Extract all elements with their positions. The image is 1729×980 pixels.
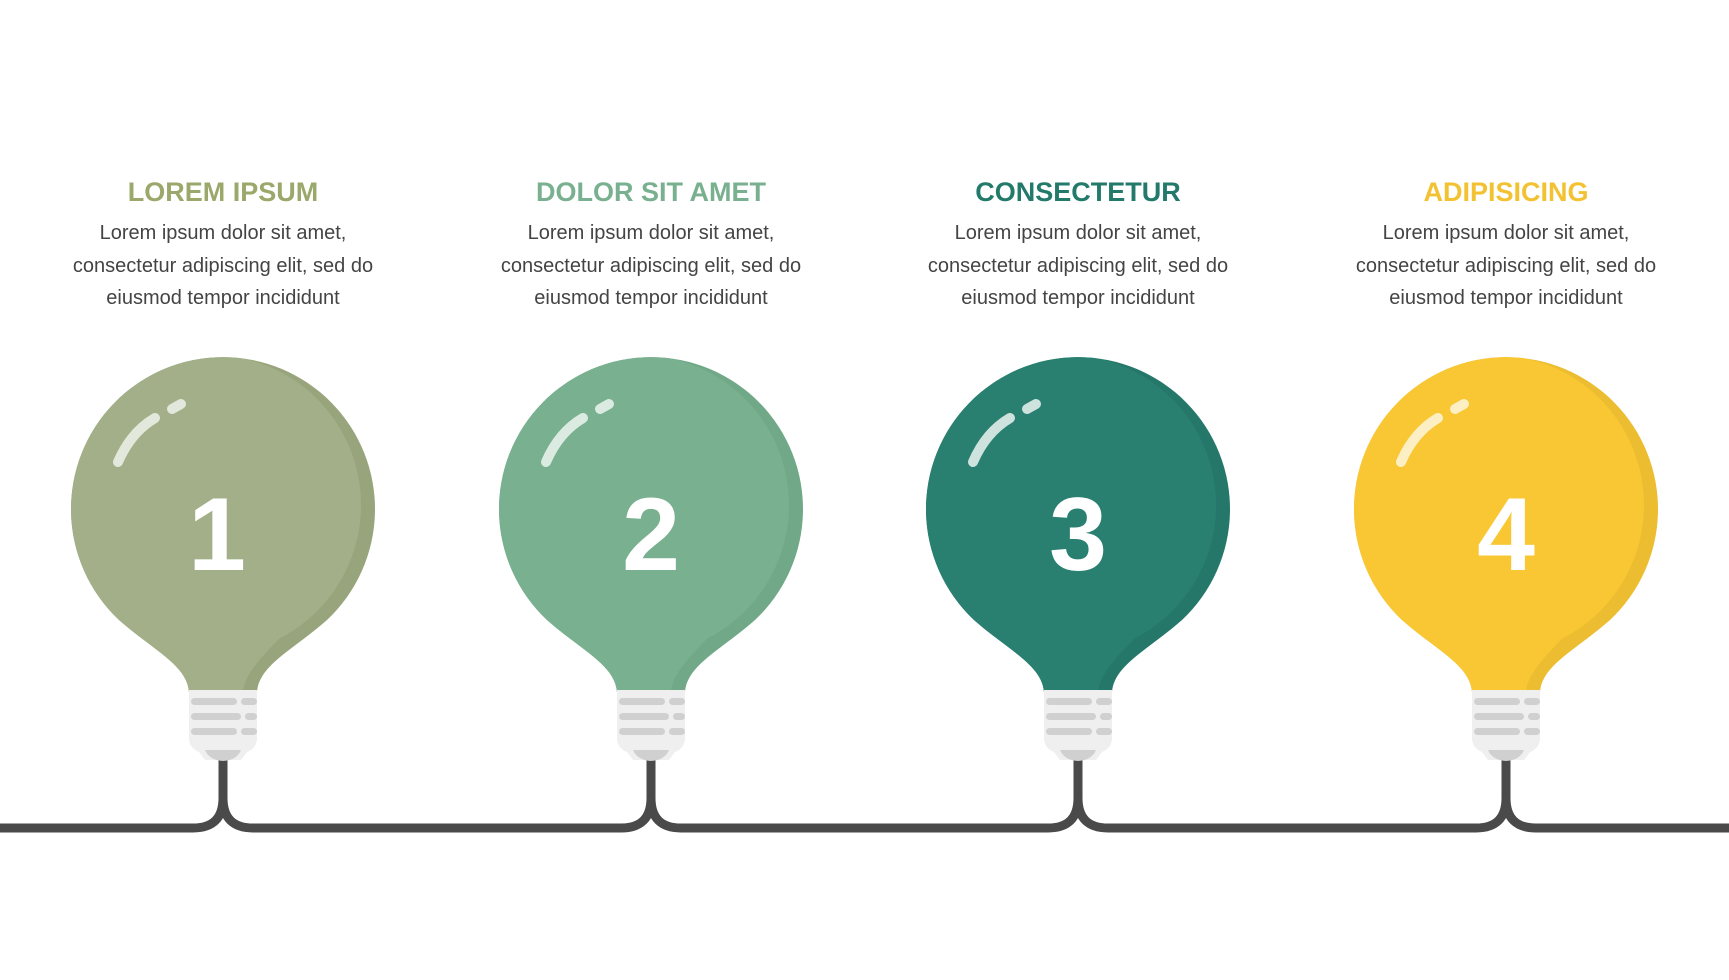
bulb 4: 4: [1477, 477, 1535, 593]
text 2: eiusmod tempor incididunt: [534, 287, 768, 309]
text 1: consectetur adipiscing elit, sed do: [73, 255, 373, 277]
bulb 2: [489, 355, 803, 761]
text 2: [501, 222, 801, 309]
text 3: consectetur adipiscing elit, sed do: [928, 255, 1228, 277]
cord: [0, 758, 1729, 828]
bulb 2: 2: [622, 477, 680, 593]
text 3: eiusmod tempor incididunt: [961, 287, 1195, 309]
title 1: LOREM IPSUM: [128, 177, 318, 207]
step 2: [489, 177, 803, 761]
bulb 1: [61, 355, 375, 761]
step 3: [916, 177, 1230, 761]
step 4: [1344, 177, 1658, 761]
text 4: consectetur adipiscing elit, sed do: [1356, 255, 1656, 277]
bulb 3: 3: [1049, 477, 1107, 593]
text 1: eiusmod tempor incididunt: [106, 287, 340, 309]
title 3: CONSECTETUR: [975, 177, 1181, 207]
bulb 3: [916, 355, 1230, 761]
bulb 1: 1: [188, 477, 246, 593]
text 3: Lorem ipsum dolor sit amet,: [955, 222, 1201, 244]
title 2: DOLOR SIT AMET: [536, 177, 766, 207]
text 4: Lorem ipsum dolor sit amet,: [1383, 222, 1629, 244]
text 1: [73, 222, 373, 309]
text 4: [1356, 222, 1656, 309]
text 3: [928, 222, 1228, 309]
text 2: Lorem ipsum dolor sit amet,: [528, 222, 774, 244]
text 2: consectetur adipiscing elit, sed do: [501, 255, 801, 277]
text 4: eiusmod tempor incididunt: [1389, 287, 1623, 309]
title 4: ADIPISICING: [1423, 177, 1589, 207]
step 1: [61, 177, 375, 761]
text 1: Lorem ipsum dolor sit amet,: [100, 222, 346, 244]
bulb 4: [1344, 355, 1658, 761]
